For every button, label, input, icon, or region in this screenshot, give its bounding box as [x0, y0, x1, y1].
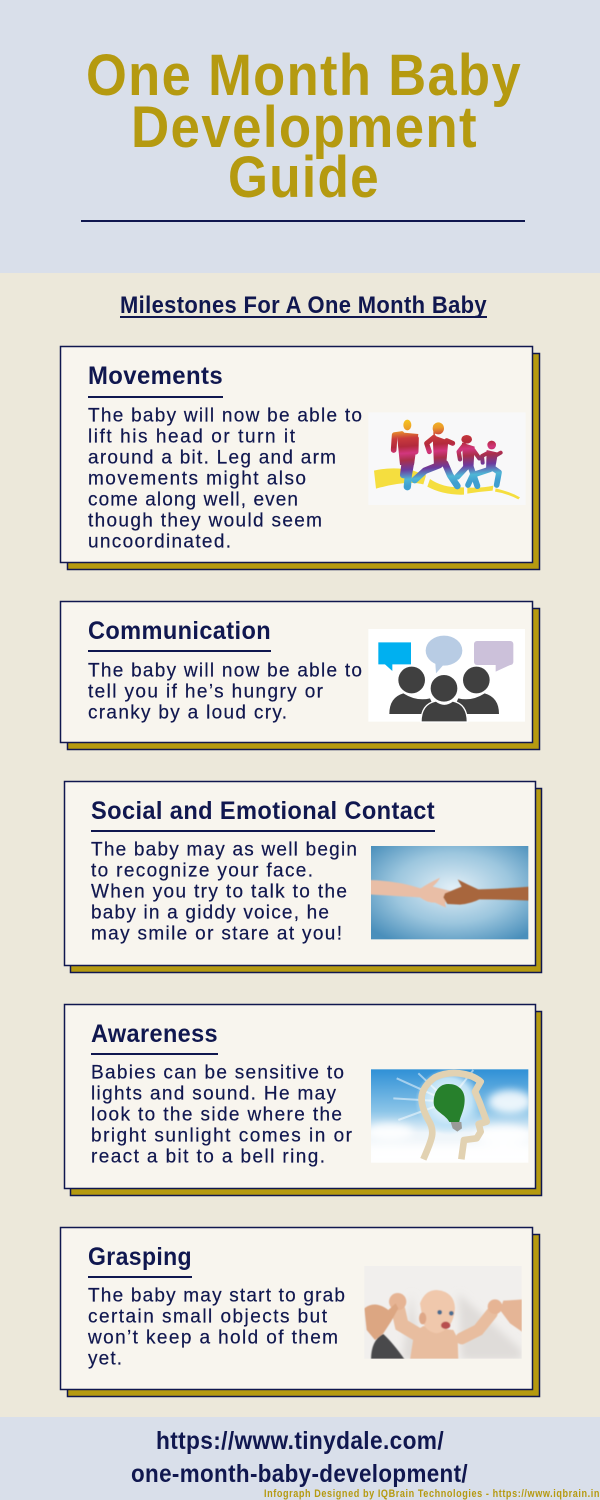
image: baby grasping fingers	[364, 1289, 522, 1359]
text: movements body: come along well, even	[88, 490, 298, 510]
text: social body	[91, 840, 357, 944]
text: movements body: uncoordinated.	[88, 532, 231, 552]
text: social body: to recognize your face.	[91, 860, 313, 882]
title: Development	[131, 95, 478, 160]
text: communication body: cranky by a loud cry.	[88, 702, 287, 724]
text: social body: may smile or stare at you!	[91, 924, 342, 944]
text: movements body: lift his head or turn it	[88, 426, 296, 448]
footer link: one-month-baby-development/	[131, 1460, 468, 1488]
text: grasping body: yet.	[88, 1348, 122, 1370]
text: awareness body: look to the side where the	[91, 1104, 342, 1126]
text: grasping body: certain small objects but	[88, 1306, 328, 1328]
title	[86, 43, 522, 210]
panel: movements	[60, 346, 540, 570]
text: movements body: movements might also	[88, 468, 306, 490]
text: communication body: tell you if he’s hungry or	[88, 682, 324, 702]
text: social body: The baby may as well begin	[91, 840, 357, 860]
icon: people talking	[368, 629, 525, 722]
heading: movements: Movements	[88, 362, 223, 390]
footer band	[0, 1417, 600, 1500]
panel: grasping	[60, 1228, 540, 1396]
text: communication body	[88, 660, 362, 724]
text: movements body: though they would seem	[88, 510, 322, 532]
text: awareness body: react a bit to a bell ring.	[91, 1146, 325, 1168]
title: Guide	[228, 145, 380, 210]
text: social body: baby in a giddy voice, he	[91, 902, 329, 924]
heading: social and emotional contact: Social and Emotional Contact	[91, 797, 435, 825]
text: awareness body: Babies can be sensitive to	[91, 1062, 344, 1084]
panel: social and emotional contact	[64, 782, 542, 972]
subheading: Milestones For A One Month Baby	[120, 292, 487, 319]
panel: awareness	[64, 1004, 542, 1196]
text: movements body: around a bit. Leg and arm	[88, 448, 336, 468]
image: head with green bulb	[371, 1069, 528, 1162]
text: movements body: The baby will now be able to	[88, 406, 362, 426]
image: reaching hands	[369, 846, 530, 939]
heading: communication: Communication	[88, 617, 271, 645]
footer link: https://www.tinydale.com/	[156, 1427, 444, 1455]
title: One Month Baby	[86, 43, 522, 108]
header band	[0, 0, 600, 273]
text: grasping body	[87, 1286, 345, 1370]
text: communication body: The baby will now be able to	[88, 660, 362, 682]
text: awareness body	[91, 1062, 353, 1168]
footer link	[131, 1427, 468, 1488]
panel: communication	[60, 602, 540, 750]
text: movements body	[88, 406, 362, 552]
icon: runners	[368, 412, 526, 505]
text: awareness body: bright sunlight comes in or	[91, 1126, 353, 1146]
text: awareness body: lights and sound. He may	[91, 1084, 336, 1104]
heading: awareness: Awareness	[91, 1020, 218, 1048]
text: social body: When you try to talk to the	[91, 882, 347, 902]
text: grasping body: won’t keep a hold of them	[87, 1328, 338, 1348]
heading: grasping: Grasping	[88, 1243, 192, 1271]
text: grasping body: The baby may start to grab	[88, 1286, 345, 1306]
